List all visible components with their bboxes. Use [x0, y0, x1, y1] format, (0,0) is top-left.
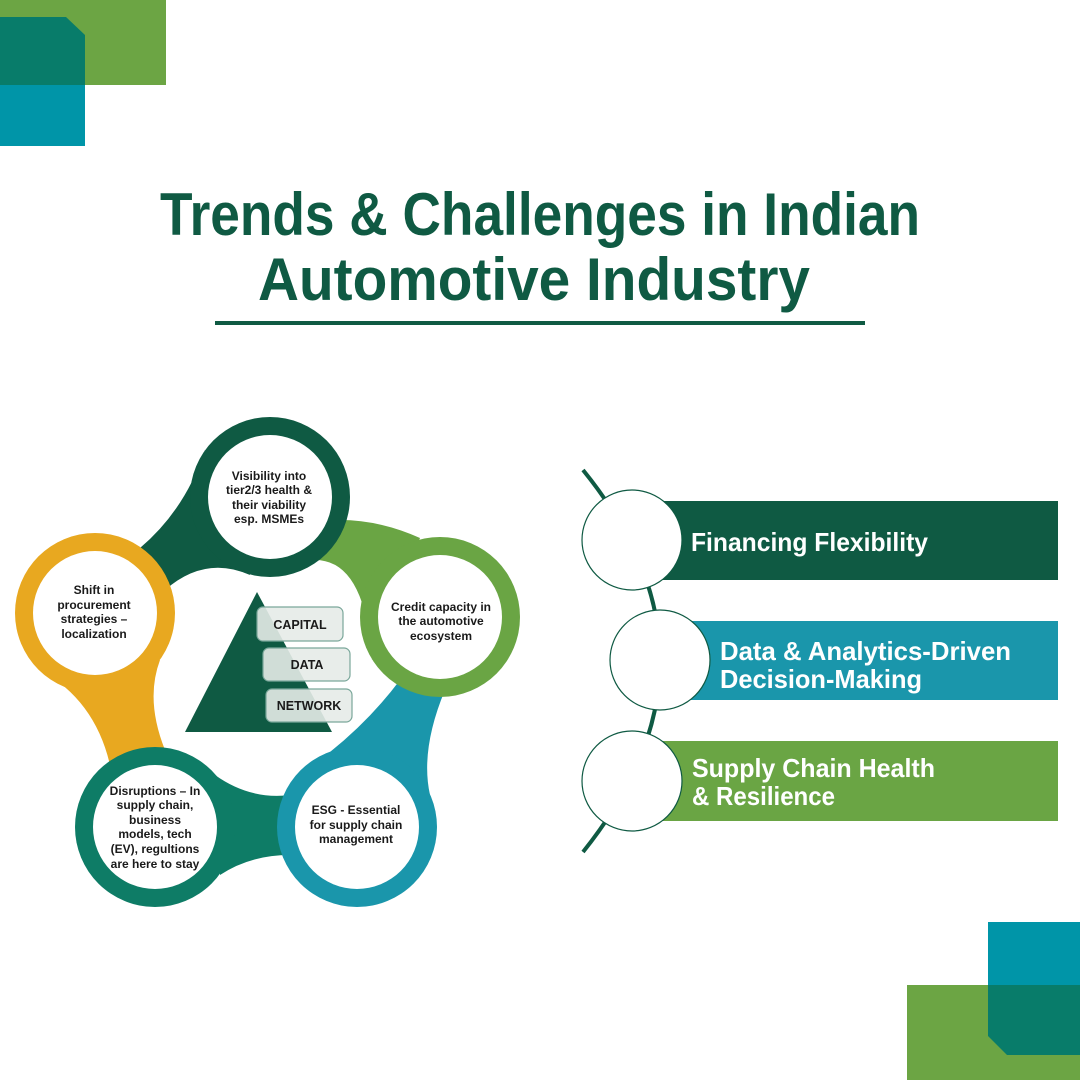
box: data: DATA — [291, 658, 323, 672]
text: disruptions — [110, 784, 200, 871]
bar: supply chain health — [582, 731, 1058, 831]
bar: financing flexibility: Financing Flexibility — [691, 527, 929, 557]
ring: top — [190, 417, 350, 577]
box: capital — [257, 607, 343, 641]
pyramid — [185, 592, 352, 732]
text: visibility: their viability — [232, 498, 306, 512]
title: Trends & Challenges in Indian — [160, 181, 920, 248]
text: disruptions: are here to stay — [111, 857, 200, 871]
ring: left — [15, 533, 175, 693]
text: shift: strategies – — [61, 612, 128, 626]
text: shift: localization — [61, 627, 127, 641]
text: shift: procurement — [57, 598, 131, 612]
bar: supply chain health: Supply Chain Health — [692, 753, 935, 783]
bar: data analytics: Decision-Making — [720, 664, 922, 694]
text: disruptions: Disruptions – In — [110, 784, 200, 798]
box: data — [263, 648, 350, 681]
text: ESG: ESG - Essential — [312, 803, 400, 817]
text: visibility: Visibility into — [232, 469, 306, 483]
text: disruptions: business — [129, 813, 181, 827]
text: credit: ecosystem — [410, 629, 472, 643]
text: visibility: esp. MSMEs — [234, 512, 304, 526]
text: ESG: management — [319, 832, 393, 846]
ring: bottom left — [75, 747, 235, 907]
decoration: top-left corner blocks — [0, 0, 166, 146]
title — [160, 181, 920, 313]
box: capital: CAPITAL — [273, 618, 327, 632]
cycle diagram — [15, 417, 520, 907]
text: shift — [57, 583, 131, 641]
text: visibility: tier2/3 health & — [226, 483, 312, 497]
box: network: NETWORK — [277, 699, 341, 713]
ring: right — [360, 537, 520, 697]
text: disruptions: models, tech — [118, 827, 192, 841]
text: visibility — [226, 469, 312, 526]
title: Automotive Industry — [258, 246, 811, 313]
ring: bottom right — [277, 747, 437, 907]
text: shift: Shift in — [74, 583, 114, 597]
box: network — [266, 689, 352, 722]
bar: data analytics: Data & Analytics-Driven — [720, 636, 1011, 666]
text: credit: the automotive — [398, 614, 484, 628]
text: credit — [391, 600, 491, 643]
bar: data analytics — [610, 610, 1058, 710]
timeline arc — [583, 470, 660, 852]
text: ESG — [310, 803, 402, 846]
text: ESG: for supply chain — [310, 818, 402, 832]
bar: supply chain health: & Resilience — [692, 781, 835, 811]
connector tails — [140, 450, 250, 590]
text: disruptions: (EV), regultions — [111, 842, 200, 856]
decoration: bottom-right corner blocks — [907, 922, 1080, 1080]
text: disruptions: supply chain, — [117, 798, 193, 812]
bar: financing flexibility — [582, 490, 1058, 590]
text: credit: Credit capacity in — [391, 600, 491, 614]
title underline — [215, 321, 865, 325]
